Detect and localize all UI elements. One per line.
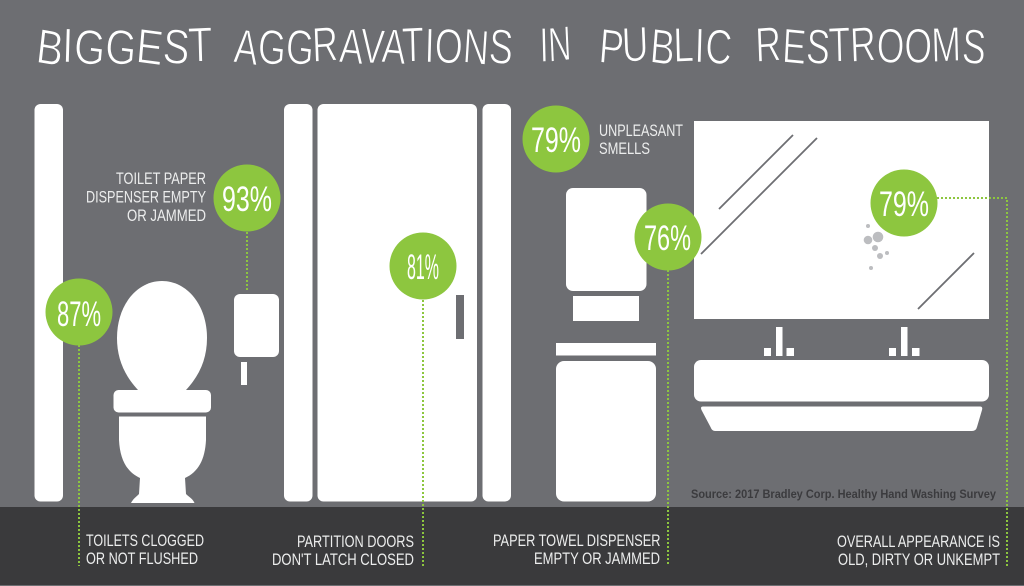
icon: dirty mirror (694, 121, 989, 319)
stat: 76% paper towel dispenser (634, 204, 702, 270)
footer band (0, 507, 1024, 585)
label: toilet paper dispenser: OR JAMMED (127, 207, 206, 225)
leader lines (79, 198, 1007, 566)
label: paper towel dispenser: EMPTY OR JAMMED (534, 550, 660, 568)
stat: 87% toilets clogged (46, 278, 112, 346)
title: RESTROOMS (754, 18, 989, 75)
icon: toilet (114, 281, 211, 503)
label: toilets clogged: TOILETS CLOGGED (86, 532, 204, 550)
illustration: stall partitions and door (34, 104, 511, 502)
label: toilets clogged: OR NOT FLUSHED (86, 550, 198, 568)
source note: Source: 2017 Bradley Corp. Healthy Hand Washing Survey (691, 487, 996, 501)
icon: sink with faucets (694, 327, 989, 431)
label: toilet paper dispenser (86, 170, 206, 225)
stat: 93% toilet paper dispenser (214, 164, 280, 232)
label: unpleasant smells: UNPLEASANT (599, 122, 683, 140)
stat: 79% unpleasant smells: 79% (531, 121, 581, 160)
label: unpleasant smells: SMELLS (599, 140, 650, 158)
stat: 81% partition doors: 81% (407, 248, 439, 287)
label: partition doors: PARTITION DOORS (297, 533, 414, 551)
label: toilet paper dispenser: TOILET PAPER (116, 170, 206, 188)
stat: 79% unpleasant smells (522, 106, 590, 172)
label: toilets clogged (86, 532, 204, 568)
icon: toilet paper dispenser (234, 294, 279, 385)
title: BIGGEST (33, 18, 213, 77)
label: toilet paper dispenser: DISPENSER EMPTY (86, 188, 206, 206)
label: paper towel dispenser (493, 532, 661, 568)
label: partition doors (272, 533, 414, 569)
stat: 79% overall appearance: 79% (879, 185, 929, 224)
icon: paper towel dispenser and bin (556, 188, 656, 502)
stat: 76% paper towel dispenser: 76% (644, 219, 691, 258)
stat: 93% toilet paper dispenser: 93% (222, 180, 272, 219)
stat: 79% overall appearance (870, 170, 938, 236)
title: IN (538, 17, 573, 73)
label: overall appearance (837, 533, 1000, 569)
stat: 87% toilets clogged: 87% (57, 295, 101, 334)
label: partition doors: DON'T LATCH CLOSED (272, 551, 414, 569)
title: AGGRAVATIONS (232, 18, 516, 76)
label: unpleasant smells (599, 122, 683, 158)
title: PUBLIC (597, 18, 735, 76)
stat: 81% partition doors (390, 232, 456, 300)
title (33, 17, 989, 77)
label: paper towel dispenser: PAPER TOWEL DISPENSER (493, 532, 661, 550)
